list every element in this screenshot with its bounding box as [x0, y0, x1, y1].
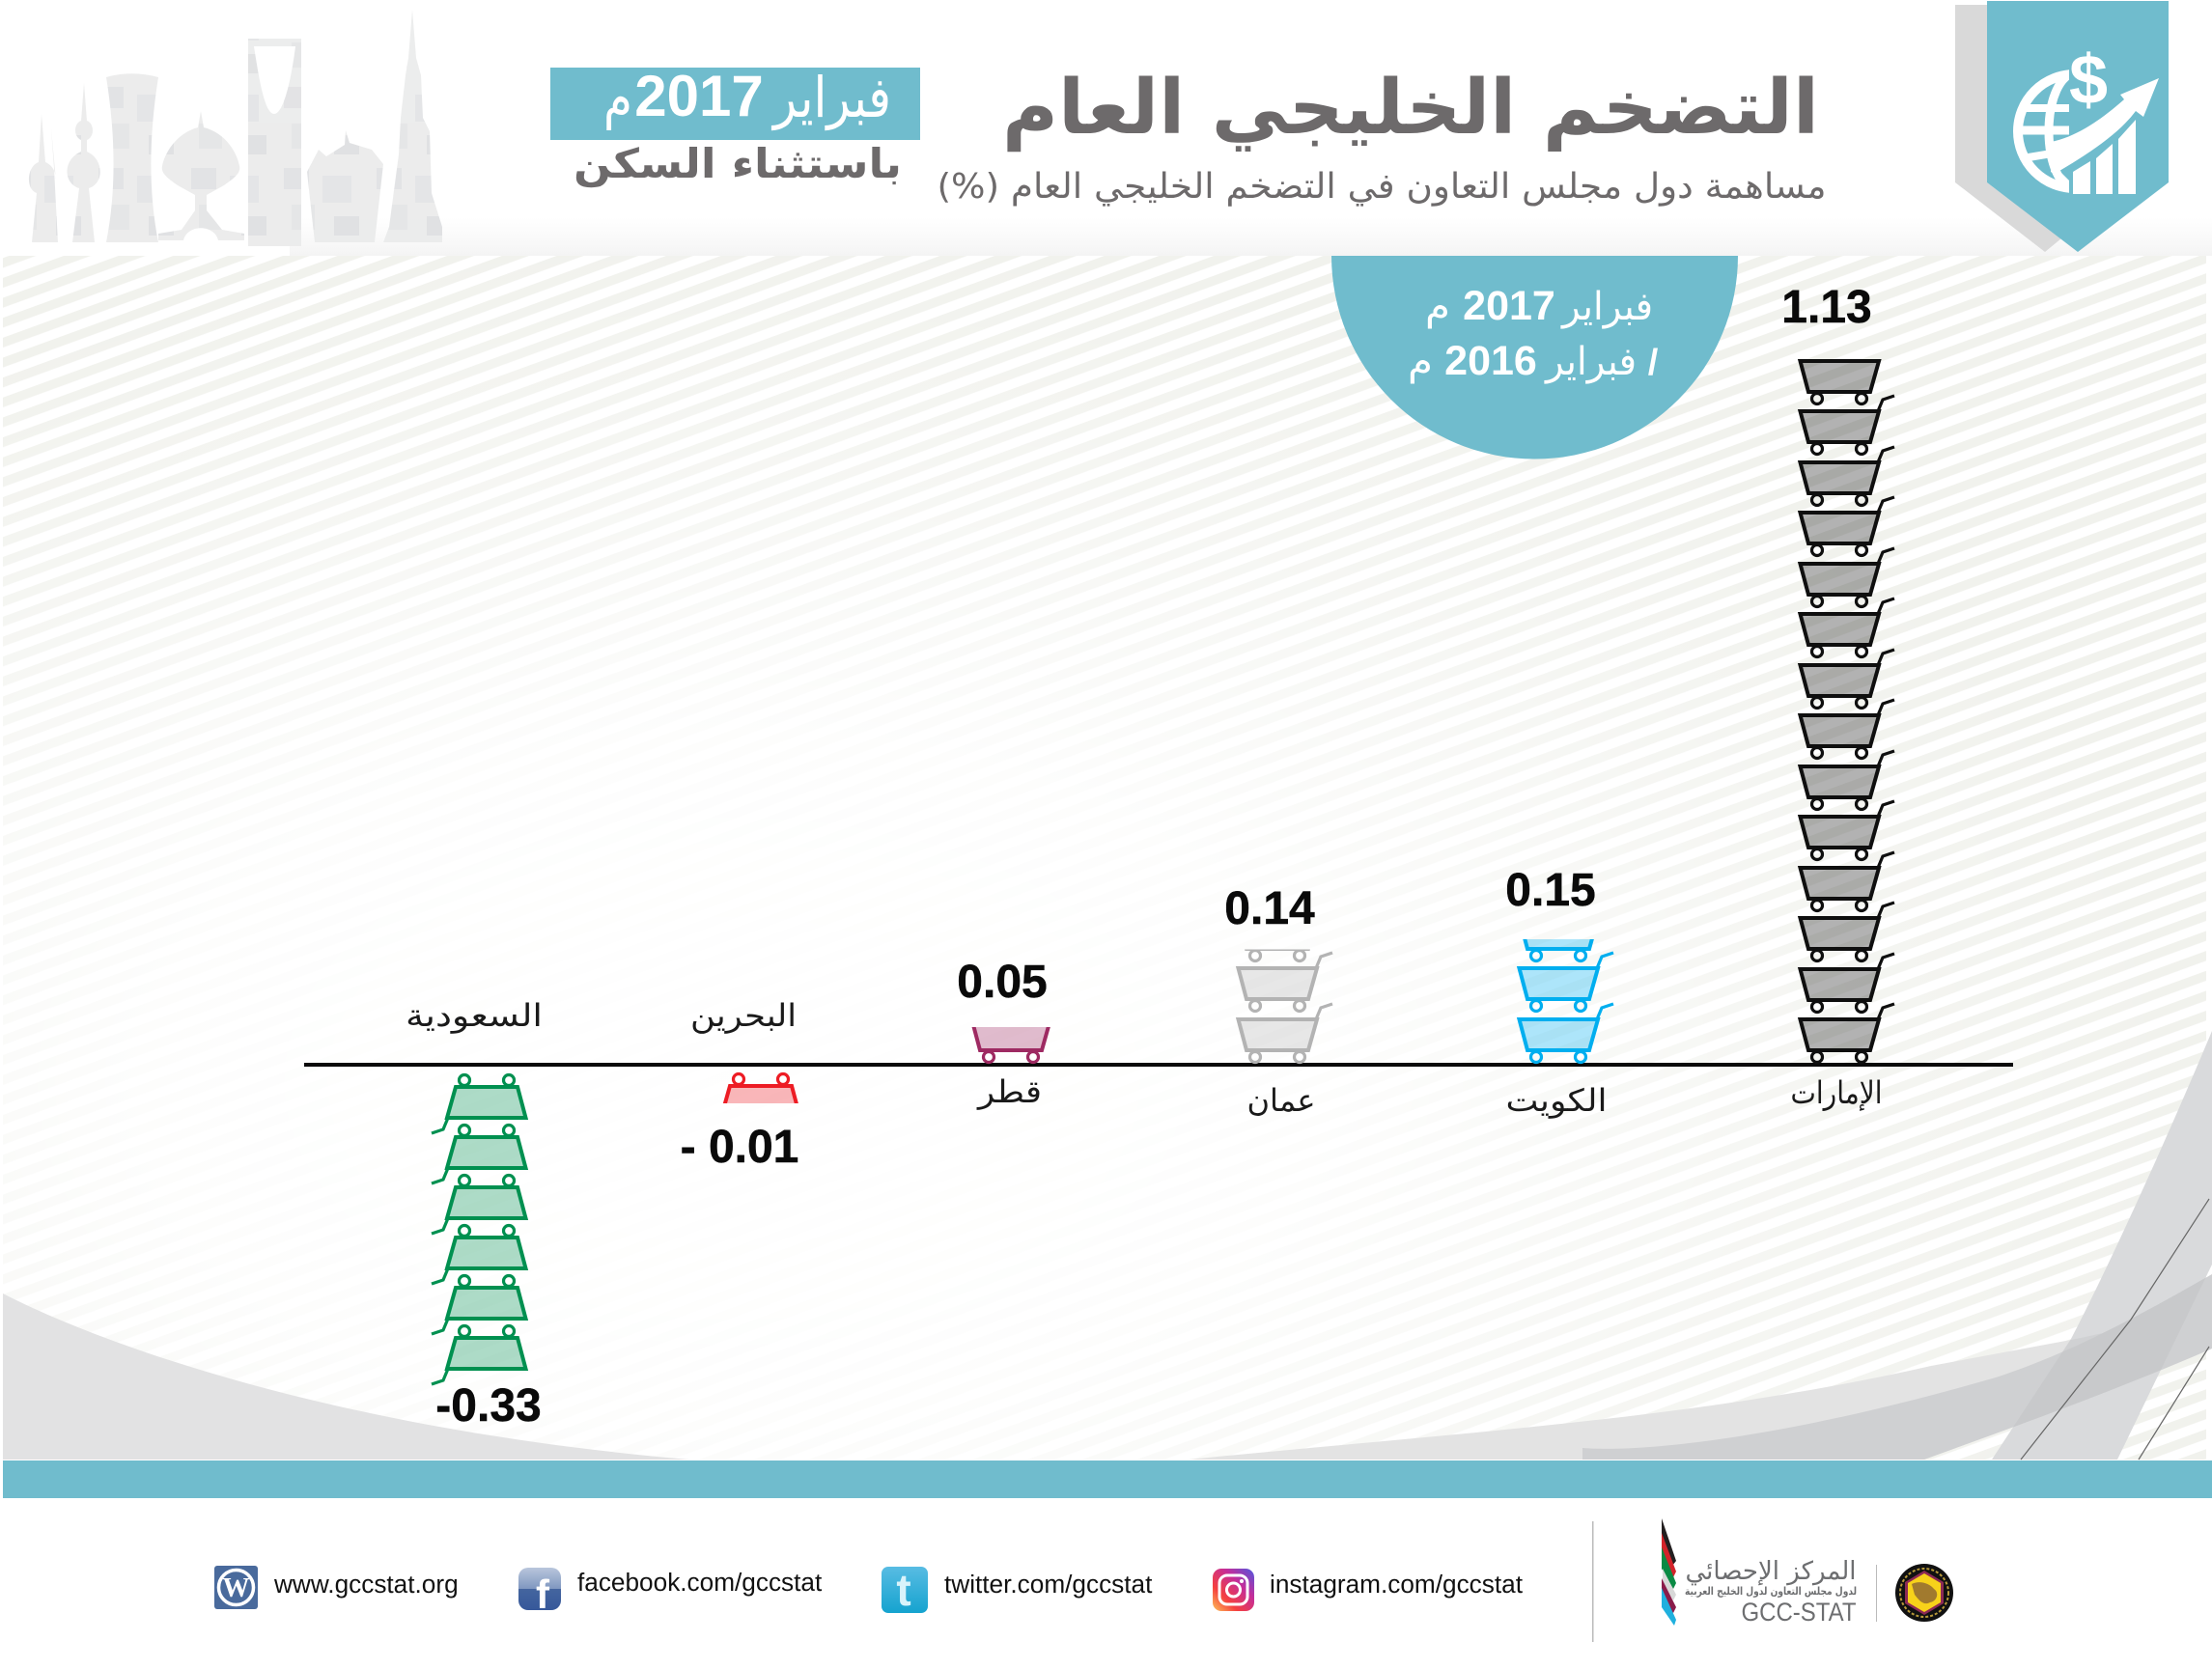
- GCC-STAT logo: لدول مجلس التعاون لدول الخليج العربية: [1685, 1585, 1857, 1598]
- label: Kuwait: الكويت: [1506, 1082, 1607, 1119]
- date box: 2017: [634, 64, 764, 128]
- UAE cart stack: [1800, 361, 1894, 1062]
- value: UAE: 1.13: [1781, 282, 1872, 333]
- ribbon badge with icon: [1955, 1, 2169, 252]
- footer link: instagram: instagram.com/gccstat: [1270, 1570, 1524, 1599]
- Oman cart stack: [1236, 950, 1332, 1064]
- footer link: twitter: twitter.com/gccstat: [944, 1570, 1153, 1599]
- value: Qatar: 0.05: [957, 957, 1048, 1008]
- skyline illustration: [29, 10, 442, 246]
- legend circle: فبراير: [1544, 340, 1637, 384]
- subheading: excluding housing: باستثناء السكن: [574, 140, 902, 188]
- value: Oman: 0.14: [1224, 883, 1315, 934]
- footer link: twitter: t: [896, 1565, 911, 1615]
- decorative swooshes bottom: [3, 1031, 2212, 1460]
- date box: [550, 64, 920, 140]
- legend circle: م: [1408, 340, 1433, 384]
- footer link: website: www.gccstat.org: [273, 1570, 459, 1599]
- subtitle: مساهمة دول مجلس التعاون في التضخم الخليجي العام (%): [937, 167, 1827, 207]
- GCC seal: [1895, 1564, 1953, 1622]
- icon: rising arrow: [2051, 78, 2159, 186]
- striped background panel: [3, 256, 2206, 1460]
- legend circle: [1331, 256, 1738, 459]
- header background: [290, 217, 2212, 256]
- legend circle: م: [1425, 285, 1450, 329]
- Bahrain cart (negative): [722, 1071, 798, 1103]
- logo separator: [1876, 1565, 1877, 1622]
- footer link: instagram: [1213, 1569, 1524, 1611]
- value: Kuwait: 0.15: [1505, 865, 1596, 916]
- legend circle: فبراير: [1560, 285, 1653, 329]
- footer link: website: [214, 1566, 459, 1609]
- icon: dollar: $: [2069, 42, 2108, 119]
- legend circle: 2016: [1444, 338, 1537, 384]
- label: Bahrain: البحرين: [690, 997, 797, 1034]
- chart baseline: [304, 1063, 2013, 1067]
- legend circle: /: [1648, 343, 1659, 383]
- GCC-STAT logo: GCC-STAT: [1742, 1598, 1856, 1627]
- teal footer band: [3, 1460, 2212, 1498]
- label: UAE: الإمارات: [1790, 1074, 1883, 1111]
- Qatar cart: [971, 1027, 1050, 1064]
- label: Oman: عمان: [1247, 1082, 1315, 1119]
- label: Qatar: قطر: [976, 1073, 1042, 1110]
- footer link: facebook: facebook.com/gccstat: [577, 1568, 823, 1597]
- GCC-STAT logo: المركز الإحصائي: [1686, 1557, 1856, 1586]
- Kuwait cart stack: [1516, 939, 1614, 1064]
- icon: bars: [2073, 120, 2136, 194]
- footer link: website: W: [222, 1573, 249, 1603]
- label: Saudi: السعودية: [406, 997, 543, 1034]
- icon: globe: [2013, 70, 2069, 193]
- date box: فبراير: [770, 65, 891, 131]
- legend circle: 2017: [1463, 283, 1555, 329]
- footer link: twitter: [882, 1565, 1153, 1615]
- value: Saudi: -0.33: [435, 1380, 542, 1432]
- value: Bahrain: - 0.01: [681, 1122, 798, 1173]
- logo ribbons: [1662, 1518, 1676, 1626]
- footer link: facebook: [518, 1568, 823, 1617]
- footer divider: [1592, 1521, 1593, 1642]
- Saudi cart stack (negative): [432, 1075, 525, 1384]
- date box: م: [603, 65, 632, 130]
- title: التضخم الخليجي العام: [1002, 65, 1819, 152]
- footer link: facebook: f: [536, 1572, 550, 1617]
- GCC-STAT logo: [1662, 1518, 1857, 1627]
